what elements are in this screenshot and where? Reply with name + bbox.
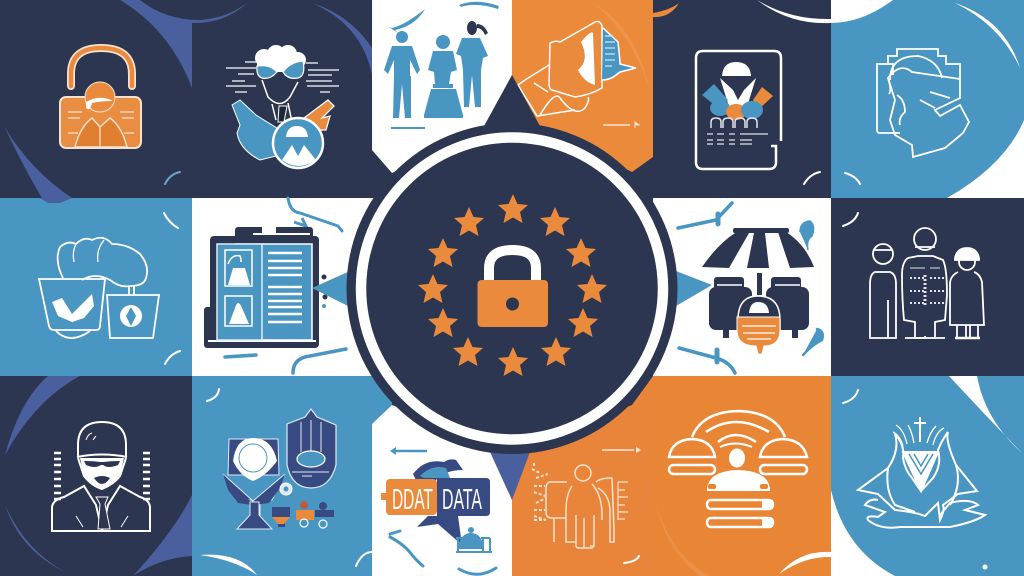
arrow: left pointing blue xyxy=(390,447,427,455)
icon: lotus with cross xyxy=(858,417,985,528)
icon: umbrella, bags and orange lock xyxy=(678,203,823,373)
ring of twelve stars xyxy=(418,194,607,376)
icon: tablet with photos and text xyxy=(204,198,346,373)
icon: cloud and two bags xyxy=(39,238,159,338)
icon: data label with bird: DATA xyxy=(442,484,482,516)
icon: head profile in frame xyxy=(877,49,969,157)
icon: central padlock xyxy=(478,250,548,327)
icon: identity card with people xyxy=(696,51,781,169)
icon: shield, trophy and figures xyxy=(223,409,336,529)
icon: agent in suit and sunglasses xyxy=(52,422,150,531)
icon: blue squiggles and small figure xyxy=(390,527,496,574)
central badge circle xyxy=(312,75,712,500)
icon: data label with bird xyxy=(381,459,490,545)
icon: three outlined people xyxy=(870,228,984,338)
icon: orange hand with scanner xyxy=(518,22,636,116)
icon: wifi arcs and people xyxy=(669,411,807,527)
icon: man with glasses and badge xyxy=(226,45,339,168)
icon: three blue figures xyxy=(384,2,499,129)
icon: person with backpack outline xyxy=(532,463,628,548)
arrow: right pointing white xyxy=(602,447,641,453)
icon: orange padlock with person xyxy=(60,48,141,148)
data label text: DDAT xyxy=(392,484,433,516)
arrow: top orange tile xyxy=(603,122,639,128)
